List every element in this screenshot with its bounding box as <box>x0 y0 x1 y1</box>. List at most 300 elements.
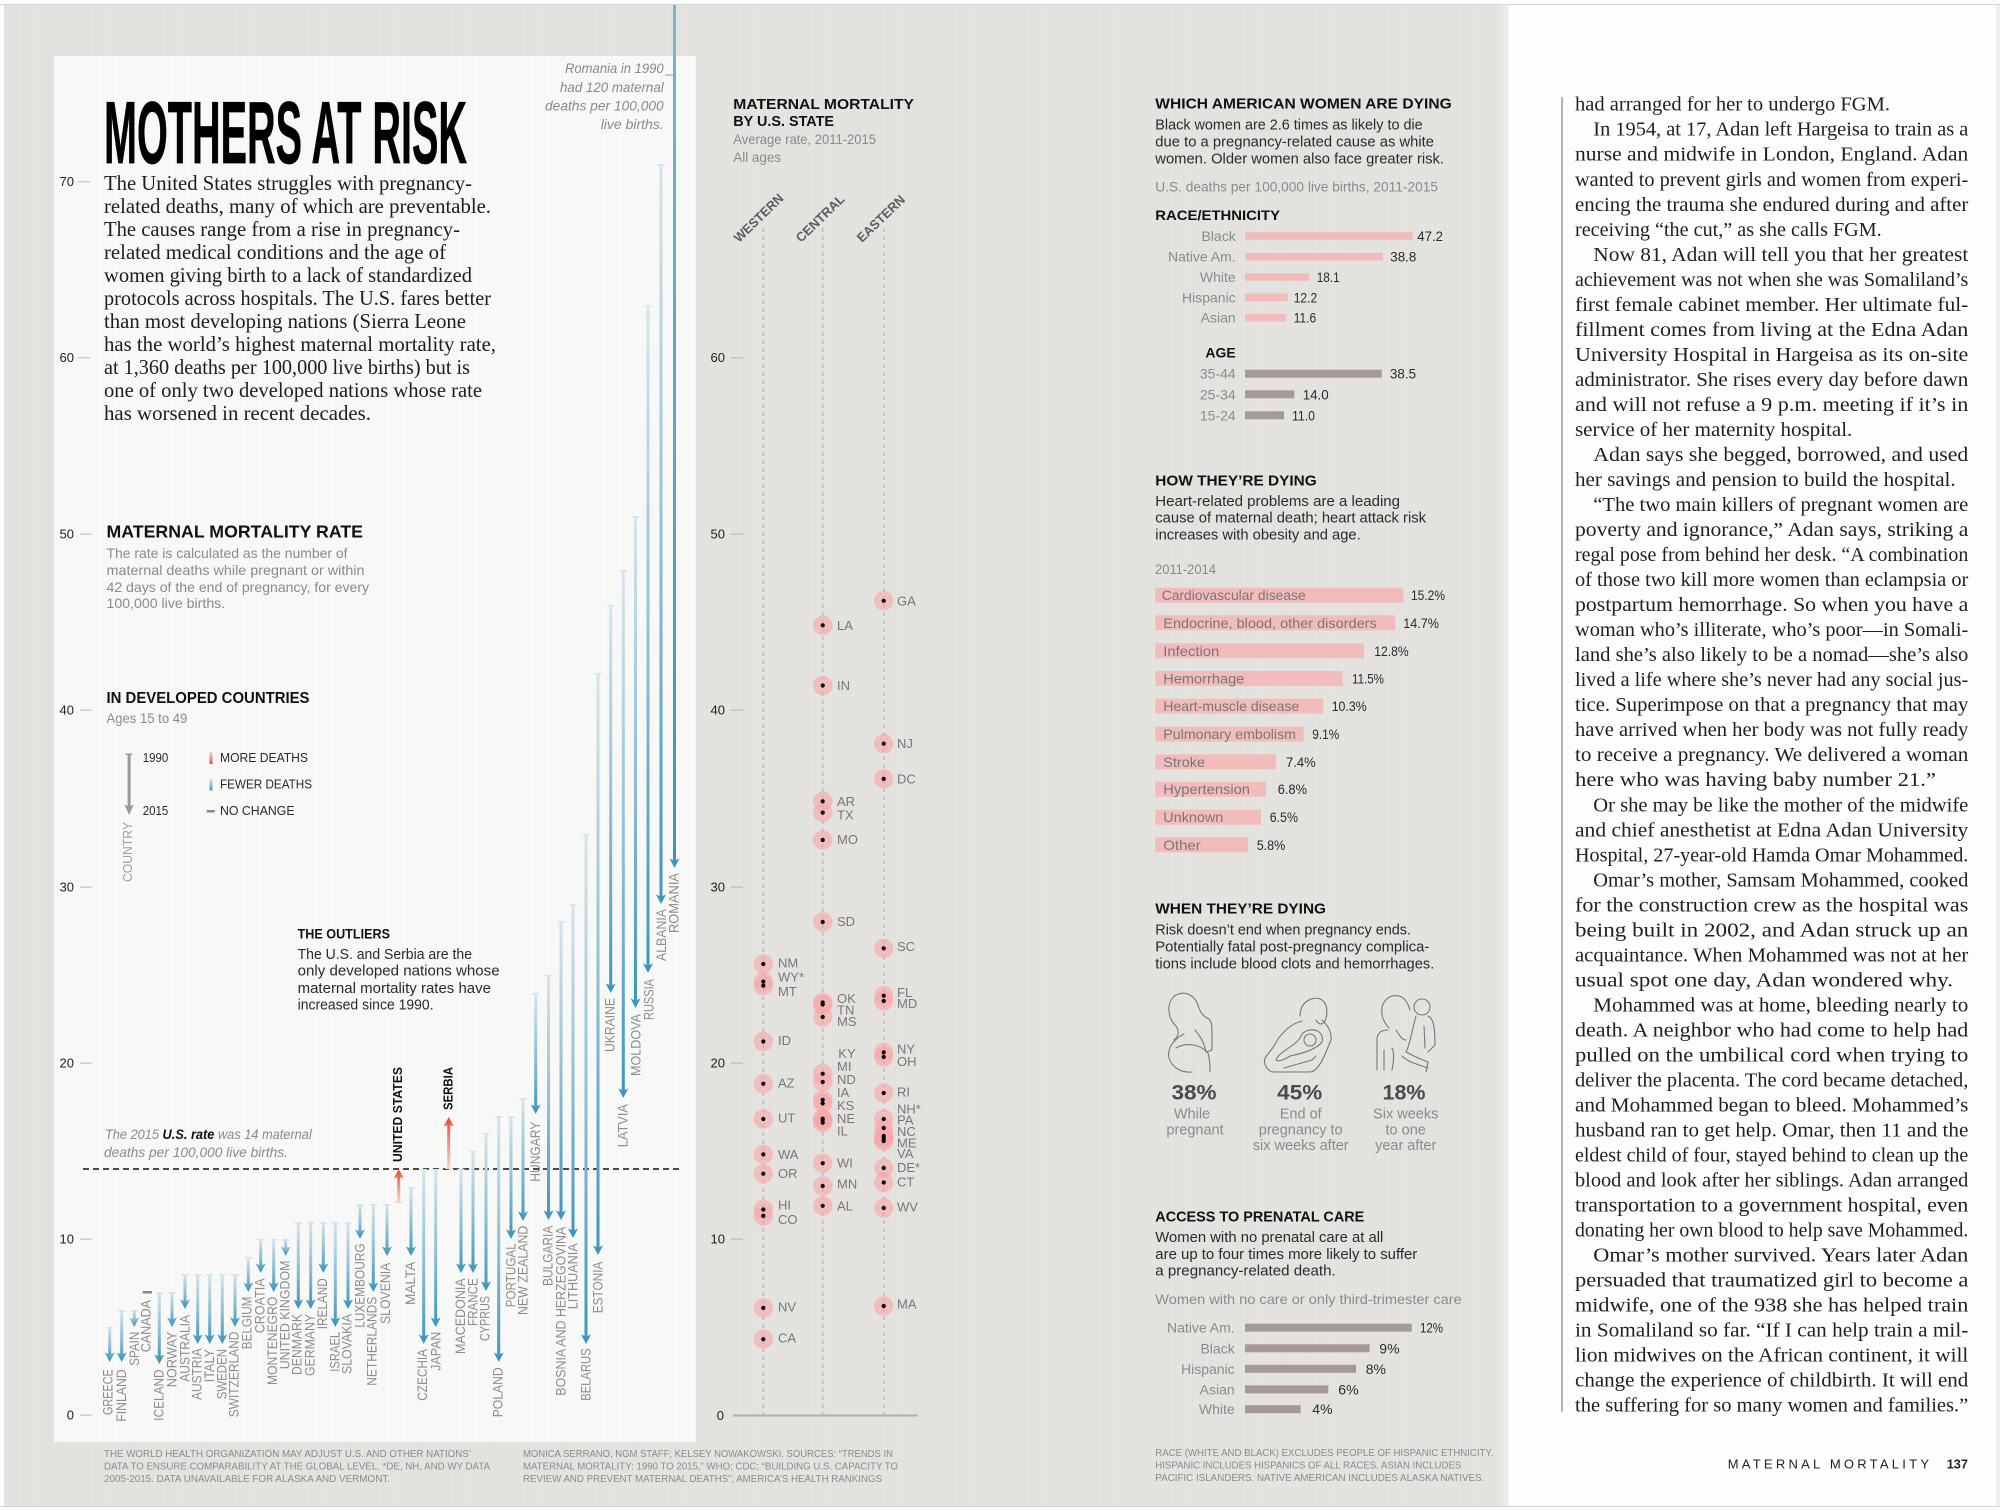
country labels: NETHERLANDS <box>365 1297 380 1386</box>
article text column: had arranged for her to undergo FGM. <box>1575 94 1890 116</box>
reference line: U.S. rate <box>83 1168 680 1170</box>
country labels: BELGIUM <box>240 1297 255 1349</box>
arrow: Portugal <box>506 1116 516 1239</box>
panel: when they're dying <box>1155 901 1438 1154</box>
bar chart: causes of death: 5.8% <box>1257 837 1285 853</box>
y axis: country chart: 40 <box>60 702 74 718</box>
article text column: University Hospital in Hargeisa as its on-site <box>1575 344 1968 366</box>
stat: end of pregnancy to six weeks after: pregnancy to <box>1259 1122 1343 1138</box>
intro text block: one of only two developed nations whose rate <box>104 378 482 402</box>
country labels: IRELAND <box>315 1278 330 1329</box>
country labels: SLOVENIA <box>378 1263 393 1324</box>
unit note: U.S. deaths per 100,000 live births, 2011-2015 <box>1155 179 1438 195</box>
article text column: lion midwives on the African continent, it will <box>1575 1345 1969 1367</box>
dot plot: eastern states: OH <box>897 1054 916 1069</box>
heading: maternal mortality by U.S. state <box>733 97 914 165</box>
article text column: Hospital, 27-year-old Hamda Omar Mohammed. <box>1575 844 1968 866</box>
callout: the outliers: only developed nations whose <box>298 964 500 980</box>
article text column: lived a life where she’s never had any social jus- <box>1575 669 1968 691</box>
country labels: ITALY <box>202 1349 217 1382</box>
stat: six weeks to one year after: Six weeks <box>1373 1107 1438 1123</box>
y axis: country chart: 50 <box>60 526 74 542</box>
callout: 2015 U.S. rate: deaths per 100,000 live births. <box>104 1144 288 1160</box>
description: are up to four times more likely to suffer <box>1155 1247 1417 1263</box>
arrow: Italy <box>205 1274 215 1344</box>
dot plot: central states: NE <box>837 1111 855 1126</box>
article text column: here who was having baby number 21.” <box>1575 769 1936 791</box>
footnote: data notes <box>104 1448 490 1485</box>
dot plot: eastern states: DE* <box>897 1160 920 1175</box>
dot plot: eastern states: WV <box>897 1200 918 1214</box>
country labels <box>101 873 681 1422</box>
description: Potentially fatal post-pregnancy complica- <box>1155 939 1429 955</box>
intro text block: protocols across hospitals. The U.S. fares better <box>104 286 491 310</box>
bar chart: causes of death: 10.3% <box>1332 698 1367 714</box>
heading: maternal mortality rate: The rate is calculated as the number of <box>106 545 348 561</box>
dot plot: western states: UT <box>778 1110 795 1125</box>
footnote: race definitions: HISPANIC INCLUDES HISPANICS OF ALL RACES. ASIAN INCLUDES <box>1155 1460 1461 1472</box>
arrow: Denmark <box>293 1222 303 1309</box>
mark: Canada no change <box>143 1291 152 1294</box>
arrow: Japan <box>431 1169 441 1327</box>
country labels: ROMANIA <box>666 873 681 933</box>
callout: Romania in 1990: Romania in 1990 <box>565 60 664 76</box>
icon: mother holding newborn <box>1265 998 1331 1072</box>
dot plot: eastern states: FL <box>897 985 912 1000</box>
stat: while pregnant: While <box>1174 1107 1210 1123</box>
bar chart: age: 38.5 <box>1390 366 1416 382</box>
column rule: article <box>1561 97 1563 1412</box>
stat: end of pregnancy to six weeks after: End of <box>1280 1107 1323 1123</box>
dot plot: western states: WY* <box>778 969 804 984</box>
description: Heart-related problems are a leading <box>1155 494 1400 510</box>
country labels: LUXEMBOURG <box>352 1243 367 1328</box>
footnote: sources: MONICA SERRANO, NGM STAFF; KELSEY NOWAKOWSKI. SOURCES: “TRENDS IN <box>523 1448 893 1460</box>
country labels: UKRAINE <box>602 998 617 1052</box>
country labels: RUSSIA <box>641 979 656 1020</box>
country labels: LATVIA <box>616 1104 631 1147</box>
unit note: Women with no care or only third-trimester care <box>1155 1291 1462 1307</box>
dot plot: western states: CO <box>778 1212 798 1227</box>
article text column: Omar’s mother survived. Years later Adan <box>1593 1245 1968 1267</box>
country labels: BULGARIA <box>541 1226 556 1286</box>
dot plot: eastern states: DC <box>897 771 916 786</box>
arrow: Belarus <box>581 834 591 1344</box>
article text column: Omar’s mother, Samsam Mohammed, cooked <box>1593 869 1968 891</box>
intro text block: has the world’s highest maternal mortality rate, <box>104 332 496 356</box>
bar chart: late or no care: Asian <box>1200 1381 1235 1397</box>
article text column: regal pose from behind her desk. “A combination <box>1575 544 1968 566</box>
arrow: Latvia <box>618 570 628 1098</box>
callout: 2015 U.S. rate <box>104 1126 313 1160</box>
dot plot: central states: MI <box>837 1059 851 1074</box>
footnote: sources: MATERNAL MORTALITY: 1990 TO 2015,” WHO; CDC; “BUILDING U.S. CAPACITY TO <box>523 1460 898 1472</box>
country labels: MONTENEGRO <box>265 1297 280 1385</box>
arrow: Czechia <box>419 1169 429 1344</box>
dot plot: central states: MN <box>837 1176 857 1192</box>
axis: state chart: 60 <box>711 350 725 365</box>
article text column: “The two main killers of pregnant women are <box>1593 494 1968 516</box>
description: Black women are 2.6 times as likely to die <box>1155 117 1423 133</box>
country labels: HUNGARY <box>528 1122 543 1182</box>
y axis: country chart: 20 <box>60 1056 74 1070</box>
country labels: FRANCE <box>466 1278 481 1326</box>
intro text block: related medical conditions and the age of <box>104 240 446 264</box>
arrow: United Kingdom <box>281 1239 291 1256</box>
bar chart: causes of death: Heart-muscle disease <box>1163 698 1300 714</box>
text: MOTHERS AT RISK <box>104 83 467 182</box>
description: tions include blood clots and hemorrhages. <box>1155 956 1434 972</box>
description: a pregnancy-related death. <box>1155 1264 1336 1280</box>
article text column: administrator. She rises every day before dawn <box>1575 369 1968 391</box>
arrow: Montenegro <box>269 1239 279 1292</box>
bar chart: late or no care: Black <box>1200 1340 1236 1356</box>
dot plot: central states: IL <box>837 1124 848 1138</box>
legend: FEWER DEATHS <box>220 778 312 792</box>
arrow: Switzerland <box>230 1274 240 1327</box>
callout: the outliers: maternal mortality rates have <box>298 981 491 997</box>
arrow: New Zealand <box>518 1098 528 1221</box>
article text column <box>1575 94 1969 1417</box>
intro text block: women giving birth to a lack of standardized <box>104 263 472 287</box>
arrow: Croatia <box>256 1239 266 1273</box>
country labels: CROATIA <box>252 1278 267 1333</box>
column headers: regions: CENTRAL <box>793 191 848 245</box>
arrow: Slovenia <box>382 1204 392 1256</box>
bar chart: causes of death: 7.4% <box>1286 754 1316 770</box>
heading: maternal mortality rate: 100,000 live births. <box>106 595 225 611</box>
bar chart: causes of death: Hemorrhage <box>1163 670 1245 686</box>
bar chart: causes of death: Cardiovascular disease <box>1162 587 1306 603</box>
stat: end of pregnancy to six weeks after: six weeks after <box>1253 1138 1349 1154</box>
stat: end of pregnancy to six weeks after <box>1253 1082 1349 1154</box>
callout: the outliers: The U.S. and Serbia are the <box>298 947 472 963</box>
heading: maternal mortality by U.S. state: MATERNAL MORTALITY <box>733 97 914 113</box>
intro text block: at 1,360 deaths per 100,000 live births) but is <box>104 355 470 379</box>
chart: change in mortality by country <box>105 5 679 1364</box>
bar chart: causes of death: 11.5% <box>1352 670 1384 686</box>
dot plot: western states: AZ <box>778 1076 795 1090</box>
dot plot: western states: OR <box>778 1166 798 1181</box>
stat: while pregnant: 38% <box>1172 1082 1217 1105</box>
heading: in developed countries: IN DEVELOPED COUNTRIES <box>106 690 310 707</box>
country labels: LITHUANIA <box>566 1243 581 1309</box>
country labels: SWEDEN <box>215 1349 230 1399</box>
bar chart: causes of death: Stroke <box>1163 754 1205 770</box>
article text column: the suffering for so many women and families.” <box>1575 1395 1968 1417</box>
dot plot: eastern states: ME <box>897 1135 917 1150</box>
bar chart: causes of death: Hypertension <box>1163 781 1250 797</box>
dot plot: eastern states: VA <box>897 1146 914 1161</box>
heading: in developed countries: Ages 15 to 49 <box>106 710 187 726</box>
arrow: Albania <box>656 164 666 904</box>
bar chart: age <box>1200 366 1416 423</box>
dot plot: eastern states: NJ <box>897 736 913 751</box>
article text column: usual spot one day, Adan wondered why. <box>1575 969 1953 991</box>
arrow: Slovakia <box>343 1222 353 1309</box>
bar chart: age: 11.0 <box>1292 407 1315 423</box>
country labels: POLAND <box>491 1367 506 1417</box>
column headers: regions <box>731 191 908 245</box>
intro text block: The United States struggles with pregnancy- <box>104 171 472 195</box>
dot plot: central states: KS <box>837 1098 855 1113</box>
arrow: Norway <box>167 1292 177 1327</box>
arrow: Estonia <box>593 673 603 1255</box>
arrow: United States <box>394 1169 404 1203</box>
bar chart: race: Asian <box>1201 310 1236 326</box>
y axis: country chart: 0 <box>67 1408 74 1422</box>
footnote: data notes: THE WORLD HEALTH ORGANIZATION MAY ADJUST U.S. AND OTHER NATIONS’ <box>104 1448 471 1460</box>
heading: maternal mortality by U.S. state: All ages <box>733 149 781 165</box>
dot plot: eastern states <box>874 591 921 1316</box>
dot plot: central states: OK <box>837 991 856 1006</box>
callout: Romania in 1990: had 120 maternal <box>560 79 665 95</box>
stat: while pregnant <box>1166 1082 1224 1138</box>
arrow: Austria <box>193 1274 203 1344</box>
callout: Romania in 1990: live births. <box>601 116 664 132</box>
country labels: BELARUS <box>578 1348 593 1401</box>
dot plot: central states: ND <box>837 1072 856 1087</box>
country labels: AUSTRALIA <box>177 1315 192 1382</box>
bar chart: race <box>1168 228 1443 326</box>
bar chart: causes of death: Endocrine, blood, other disorders <box>1163 615 1377 631</box>
arrow: France <box>468 1151 478 1273</box>
bar chart: age: 14.0 <box>1303 386 1329 402</box>
heading: HOW THEY’RE DYING <box>1155 472 1317 489</box>
description: women. Older women also face greater risk. <box>1154 151 1444 167</box>
panel: access to prenatal care <box>1155 1208 1462 1417</box>
heading: ACCESS TO PRENATAL CARE <box>1155 1208 1364 1225</box>
dot plot: eastern states: MD <box>897 996 917 1011</box>
bar chart: late or no care <box>1167 1320 1443 1417</box>
country labels: SERBIA <box>441 1067 455 1110</box>
heading: maternal mortality rate: 42 days of the end of pregnancy, for every <box>106 579 369 595</box>
panel: white chart background <box>54 56 696 1442</box>
country labels: MACEDONIA <box>453 1278 468 1354</box>
description <box>1154 117 1444 167</box>
article text column: poverty and ignorance,” Adan says, striking a <box>1575 519 1968 541</box>
callout: Romania in 1990: deaths per 100,000 <box>545 98 664 114</box>
description: due to a pregnancy-related cause as white <box>1155 135 1434 151</box>
arrow: Hungary <box>531 993 541 1114</box>
axis: state chart: 30 <box>711 880 725 894</box>
article text column: Mohammed was at home, bleeding nearly to <box>1593 994 1968 1016</box>
dot plot: eastern states: GA <box>897 593 916 608</box>
dot plot: central states: IN <box>837 678 850 693</box>
heading: maternal mortality rate: maternal deaths while pregnant or within <box>106 562 364 578</box>
intro text block: The causes range from a rise in pregnancy- <box>104 217 460 241</box>
callout: the outliers: increased since 1990. <box>298 998 434 1014</box>
dot plot: eastern states: CT <box>897 1174 914 1190</box>
arrow: Sweden <box>217 1274 227 1344</box>
heading: maternal mortality rate: MATERNAL MORTALITY RATE <box>106 522 363 542</box>
article text column: in Somaliland so far. “If I can help train a mil- <box>1575 1320 1968 1342</box>
country labels: NEW ZEALAND <box>516 1225 531 1315</box>
dot plot: western states: HI <box>778 1198 791 1212</box>
country labels: DENMARK <box>290 1314 305 1375</box>
arrow: Bulgaria <box>544 975 554 1220</box>
arrow: Netherlands <box>368 1204 378 1292</box>
panel: which American women are dying <box>1154 95 1452 423</box>
y axis: country chart: 60 <box>60 350 74 365</box>
dot plot: western states: NV <box>778 1300 796 1314</box>
axis: state chart: 40 <box>711 702 725 718</box>
footnote: sources: REVIEW AND PREVENT MATERNAL DEATHS”; AMERICA’S HEALTH RANKINGS <box>523 1473 882 1485</box>
arrow: Germany <box>306 1222 316 1309</box>
dot plot: western states: CA <box>778 1330 796 1346</box>
country labels: NORWAY <box>164 1332 179 1387</box>
dot plot: western states <box>754 954 804 1349</box>
article text column: and Mohammed began to bleed. Mohammed’s <box>1575 1094 1969 1116</box>
dot plot: central states: TN <box>837 1002 854 1017</box>
bar chart: causes of death: Unknown <box>1163 809 1223 825</box>
dot plot: eastern states: RI <box>897 1084 910 1100</box>
callout: 2015 U.S. rate: The 2015 U.S. rate was 14 maternal <box>105 1126 313 1142</box>
country labels: JAPAN <box>428 1332 443 1371</box>
dot plot: eastern states: NH* <box>897 1102 921 1116</box>
article text column: for the construction crew as the hospital was <box>1575 894 1969 916</box>
footnote: race definitions <box>1155 1447 1493 1484</box>
arrow: Australia <box>180 1274 190 1309</box>
bar chart: late or no care: 8% <box>1366 1361 1386 1377</box>
stat: end of pregnancy to six weeks after: 45% <box>1277 1082 1323 1105</box>
bar chart: race: White <box>1200 269 1236 285</box>
article text column: persuaded that traumatized girl to become a <box>1575 1270 1968 1292</box>
folio: page footer: MATERNAL MORTALITY <box>1728 1456 1929 1471</box>
stat: six weeks to one year after: to one <box>1386 1122 1426 1138</box>
country labels: ESTONIA <box>591 1262 606 1313</box>
arrow: Romania <box>670 5 680 868</box>
article text column: being built in 2002, and Adan struck up an <box>1575 919 1968 941</box>
dot plot: central states: MS <box>837 1014 857 1029</box>
article text column: first female cabinet member. Her ultimate ful- <box>1575 294 1968 316</box>
legend <box>121 750 312 882</box>
dot plot: central states: WI <box>837 1156 853 1171</box>
article text column: to receive a pregnancy. We delivered a woman <box>1575 744 1968 766</box>
subheading: race: RACE/ETHNICITY <box>1155 207 1281 223</box>
column headers: regions: EASTERN <box>854 192 908 245</box>
country labels: ICELAND <box>152 1369 167 1421</box>
dot plot: eastern states: NC <box>897 1124 916 1139</box>
description <box>1155 1230 1417 1280</box>
legend: NO CHANGE <box>220 804 295 818</box>
bar chart: late or no care: 6% <box>1338 1381 1359 1397</box>
arrow: Lithuania <box>568 904 578 1238</box>
footnote: race definitions: PACIFIC ISLANDERS. NATIVE AMERICAN INCLUDES ALASKA NATIVES. <box>1155 1472 1484 1484</box>
arrow: Belgium <box>243 1257 253 1292</box>
country labels: CYPRUS <box>478 1296 493 1341</box>
dot plot: central states: LA <box>837 618 853 633</box>
bar chart: race: Native Am. <box>1168 249 1236 265</box>
article text column: encing the trauma she endured during and after <box>1575 194 1969 216</box>
bar chart: late or no care: Native Am. <box>1167 1320 1235 1336</box>
heading: WHICH AMERICAN WOMEN ARE DYING <box>1155 95 1452 112</box>
dot plot: eastern states: MA <box>897 1296 917 1312</box>
country labels: GERMANY <box>302 1314 317 1376</box>
article text column: In 1954, at 17, Adan left Hargeisa to train as a <box>1593 119 1968 141</box>
panel: how they're dying <box>1155 472 1445 853</box>
dot plot: central states: SD <box>837 914 855 929</box>
intro text block: than most developing nations (Sierra Leone <box>104 309 466 333</box>
article text column: midwife, one of the 938 she has helped train <box>1575 1295 1968 1317</box>
dot plot: eastern states: PA <box>897 1112 914 1128</box>
country labels: AUSTRIA <box>190 1348 205 1400</box>
country labels: CANADA <box>138 1300 153 1352</box>
country labels: CZECHIA <box>415 1349 430 1401</box>
country labels: SPAIN <box>127 1332 142 1366</box>
dot plot: central states: KY <box>838 1046 856 1061</box>
stat: six weeks to one year after: year after <box>1375 1138 1436 1154</box>
country labels: BOSNIA AND HERZEGOVINA <box>553 1227 568 1396</box>
axis: state chart: 20 <box>711 1056 725 1070</box>
article text column: nurse and midwife in London, England. Adan <box>1575 144 1968 166</box>
legend: MORE DEATHS <box>220 751 308 765</box>
bar chart: late or no care: 4% <box>1312 1401 1333 1417</box>
stat: six weeks to one year after: 18% <box>1382 1082 1426 1105</box>
description: cause of maternal death; heart attack risk <box>1155 511 1427 527</box>
axis: state chart: 10 <box>711 1232 725 1246</box>
folio: page footer: 137 <box>1947 1456 1968 1471</box>
country labels: UNITED KINGDOM <box>277 1261 292 1369</box>
dot plot: western states: MT <box>778 984 797 999</box>
period note: 2011-2014 <box>1155 561 1216 577</box>
dot plot: eastern states: NY <box>897 1042 915 1056</box>
subheading: age: AGE <box>1205 345 1236 361</box>
arrow: Luxembourg <box>355 1204 365 1239</box>
legend: COUNTRY <box>121 821 135 882</box>
article text column: land she’s also likely to be a nomad—she’s also <box>1575 644 1968 666</box>
arrow: Ukraine <box>606 605 616 993</box>
arrow: Malta <box>406 1187 416 1256</box>
axis: state chart: 0 <box>717 1408 724 1423</box>
bar chart: causes of death: 6.8% <box>1278 781 1307 797</box>
article text column: acquaintance. When Mohammed was not at her <box>1575 944 1969 966</box>
article text column: and will not refuse a 9 p.m. meeting if it’s in <box>1575 394 1968 416</box>
dot plot: western states: ID <box>778 1033 791 1048</box>
country labels: MOLDOVA <box>628 1014 643 1076</box>
dot plot: central states: TX <box>837 808 854 823</box>
article text column: her savings and pension to build the hospital. <box>1575 469 1956 491</box>
legend: 1990 <box>143 750 168 765</box>
country labels: SLOVAKIA <box>340 1314 355 1374</box>
callout: the outliers <box>298 927 500 1014</box>
heading: maternal mortality by U.S. state: BY U.S. STATE <box>733 114 834 130</box>
article text column: deliver the placenta. The cord became detached, <box>1575 1070 1968 1092</box>
arrow: Israel <box>330 1222 340 1327</box>
axis: state chart: 50 <box>711 526 725 542</box>
stat: six weeks to one year after <box>1373 1082 1438 1154</box>
bar chart: race: 18.1 <box>1317 269 1340 285</box>
column headers: regions: WESTERN <box>731 191 786 245</box>
stat: while pregnant: pregnant <box>1166 1122 1224 1138</box>
description: Risk doesn’t end when pregnancy ends. <box>1155 923 1411 939</box>
legend: 2015 <box>143 803 168 818</box>
country labels: PORTUGAL <box>503 1243 518 1307</box>
heading: maternal mortality rate <box>106 522 369 611</box>
arrow: Spain <box>129 1310 139 1327</box>
arrow: Cyprus <box>481 1133 491 1291</box>
article text column: woman who’s illiterate, who’s poor—in Somali- <box>1575 619 1968 641</box>
callout: Romania in 1990 <box>545 60 673 132</box>
arrow: Moldova <box>630 516 640 1008</box>
bar chart: causes of death: 14.7% <box>1403 615 1439 631</box>
arrow: Ireland <box>318 1222 328 1273</box>
dot plot: central states: AL <box>837 1198 853 1213</box>
footnote: sources <box>523 1448 898 1485</box>
intro text block: has worsened in recent decades. <box>104 401 371 425</box>
bar chart: causes of death: Pulmonary embolism <box>1163 726 1296 742</box>
article text column: pulled on the umbilical cord when trying to <box>1575 1044 1968 1066</box>
